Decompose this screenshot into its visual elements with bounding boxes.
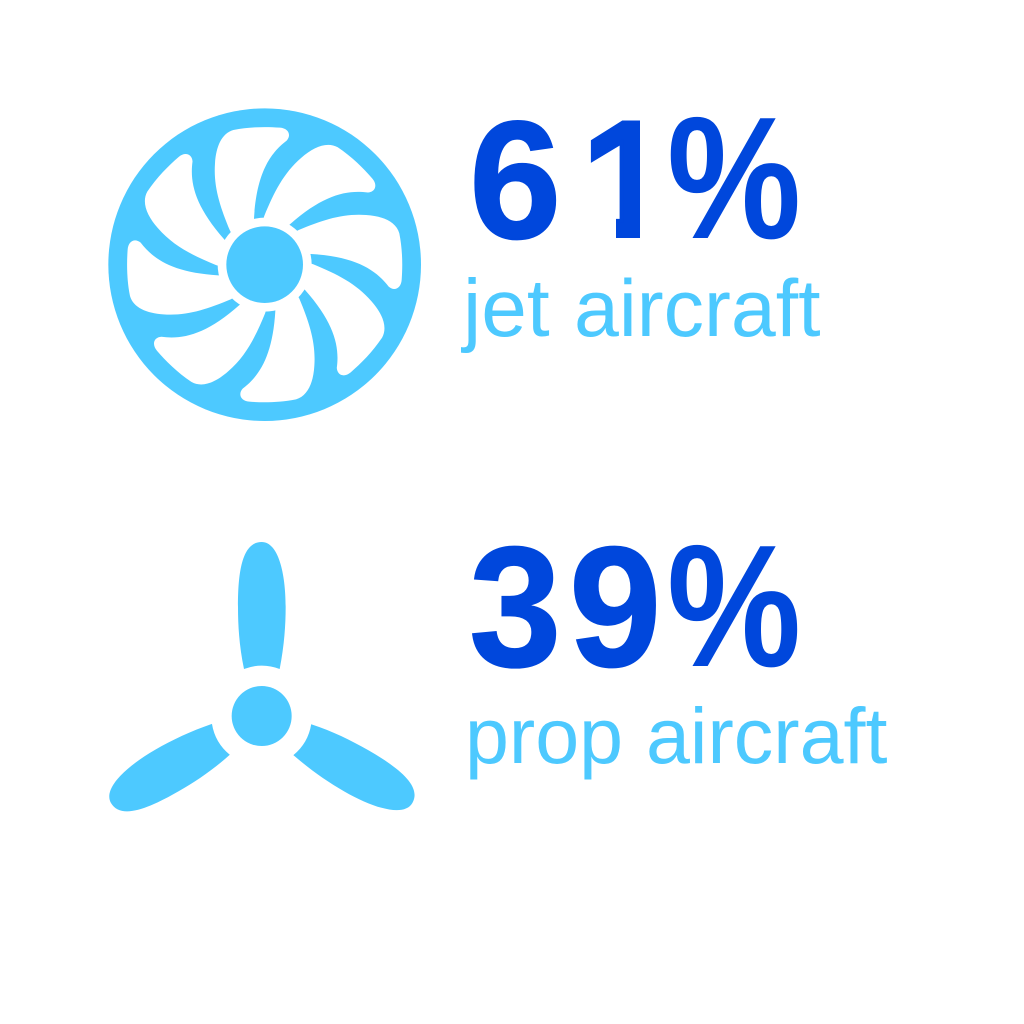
stat: 39%: 9	[569, 511, 661, 703]
stat: 61%: %	[667, 81, 801, 275]
stat: 61%: 1	[581, 87, 678, 274]
icon: jet turbine fan	[108, 108, 421, 421]
stat: 61%	[474, 116, 798, 240]
stat: 39%	[469, 509, 801, 703]
stat: 39%: %	[667, 509, 801, 703]
icon: three-blade propeller	[99, 542, 424, 824]
label: jet aircraft: aircraft	[574, 264, 821, 354]
stat: 61%: 6	[469, 87, 561, 274]
label: jet aircraft: jet	[461, 263, 550, 354]
label: prop aircraft: prop	[465, 691, 623, 780]
label: prop aircraft: aircraft	[646, 691, 887, 780]
stat: 39%: 3	[469, 511, 561, 703]
